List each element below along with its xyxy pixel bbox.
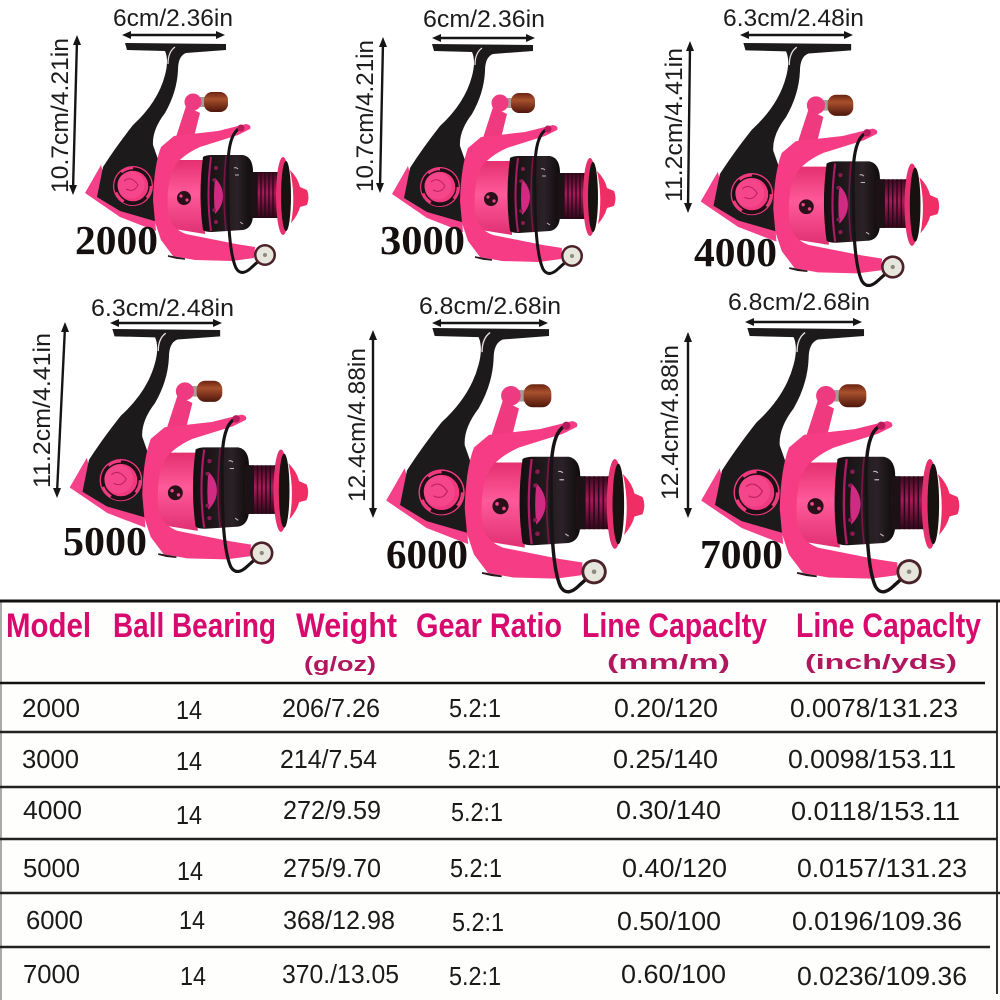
table row 4000: 0.30/140 [616, 795, 721, 825]
table row 7000 [23, 959, 967, 991]
panel: 3000 reel [352, 6, 616, 273]
table header row: (inch/yds) [805, 652, 957, 674]
table header row: Weight [296, 607, 397, 645]
reel illustration 7000 [701, 328, 959, 592]
table row 6000: 0.0196/109.36 [792, 906, 962, 936]
width label 4000: 6.3cm/2.48in [723, 5, 864, 32]
width arrow 3000 [432, 34, 535, 42]
model label 4000: 4000 [694, 229, 777, 275]
table row 2000: 2000 [22, 693, 80, 723]
table row 2000 [22, 693, 958, 725]
reel illustration 2000 [85, 43, 308, 272]
table row 7000: 7000 [23, 959, 80, 989]
height label 6000: 12.4cm/4.88in [344, 348, 371, 502]
table row 6000 [26, 905, 962, 937]
table row 4000: 4000 [23, 795, 82, 825]
table row 5000 [23, 853, 967, 886]
panel: 6000 reel [344, 293, 644, 592]
table row 5000: 5.2:1 [450, 853, 502, 883]
table row 7000: 0.0236/109.36 [797, 961, 967, 991]
table row 3000 [22, 744, 956, 776]
height label 4000: 11.2cm/4.41in [661, 48, 688, 202]
height label 2000: 10.7cm/4.21in [47, 38, 74, 193]
width label 2000: 6cm/2.36in [113, 5, 233, 32]
model label 5000: 5000 [63, 518, 147, 564]
width arrow 7000 [745, 318, 862, 326]
reel illustration 5000 [70, 329, 308, 571]
width arrow 2000 [122, 31, 225, 39]
table row 7000: 370./13.05 [282, 959, 399, 989]
height label 7000: 12.4cm/4.88in [657, 345, 684, 500]
table row 5000: 0.0157/131.23 [797, 853, 967, 883]
table row 7000: 0.60/100 [621, 959, 726, 989]
table row 3000: 5.2:1 [448, 744, 500, 774]
table row 6000: 5.2:1 [452, 907, 504, 937]
table row 6000: 0.50/100 [617, 906, 721, 936]
model label 2000: 2000 [75, 217, 158, 263]
table row 5000: 14 [177, 856, 203, 886]
model label 7000: 7000 [700, 531, 783, 577]
panel: 2000 reel [47, 5, 308, 272]
height arrow 3000 [376, 37, 387, 193]
table row 2000: 14 [176, 695, 202, 725]
width label 7000: 6.8cm/2.68in [728, 289, 870, 316]
height arrow 7000 [684, 332, 692, 518]
table row 4000: 5.2:1 [451, 797, 503, 827]
table row 2000: 0.0078/131.23 [790, 693, 958, 723]
height arrow 5000 [53, 322, 69, 498]
reel illustration 6000 [386, 328, 644, 592]
table row 5000: 5000 [23, 853, 80, 883]
table row 2000: 206/7.26 [282, 693, 380, 723]
table row 7000: 14 [180, 961, 206, 991]
table row 7000: 5.2:1 [449, 961, 501, 991]
height arrow 2000 [69, 35, 81, 195]
height label 3000: 10.7cm/4.21in [352, 40, 379, 192]
model label 6000: 6000 [386, 531, 468, 577]
table row 6000: 368/12.98 [283, 905, 395, 935]
specification table [0, 601, 1000, 1000]
height arrow 4000 [684, 41, 694, 213]
table row 6000: 6000 [26, 905, 83, 935]
table row 4000: 272/9.59 [283, 795, 381, 825]
panel: 4000 reel [661, 5, 939, 285]
model label 3000: 3000 [380, 217, 465, 263]
table row 2000: 0.20/120 [614, 693, 718, 723]
table row 5000: 275/9.70 [283, 853, 381, 883]
reel illustration 4000 [701, 43, 939, 285]
table header row: Ball Bearing [113, 607, 276, 645]
table row 3000: 214/7.54 [280, 744, 377, 774]
table row 3000: 0.0098/153.11 [788, 744, 956, 774]
table row 4000 [23, 795, 960, 830]
table row 3000: 0.25/140 [613, 744, 718, 774]
reel illustration 3000 [392, 44, 616, 273]
table row 4000: 14 [176, 800, 202, 830]
table row 5000: 0.40/120 [622, 853, 727, 883]
table header row: Model [6, 607, 91, 645]
panel: 5000 reel [29, 295, 308, 571]
height label 5000: 11.2cm/4.41in [29, 333, 56, 488]
height arrow 6000 [369, 330, 377, 518]
table header row: (g/oz) [304, 654, 376, 676]
width label 5000: 6.3cm/2.48in [91, 295, 234, 322]
table header row [6, 607, 981, 676]
table header row: Line Capaclty [582, 607, 767, 645]
width arrow 4000 [740, 31, 853, 39]
table row 3000: 14 [176, 746, 202, 776]
table header row: Gear Ratio [416, 607, 562, 645]
table row 3000: 3000 [22, 744, 79, 774]
table header row: (mm/m) [607, 652, 730, 674]
width arrow 5000 [110, 319, 222, 327]
width arrow 6000 [432, 319, 548, 327]
width label 3000: 6cm/2.36in [423, 6, 545, 33]
table row 6000: 14 [179, 905, 205, 935]
panel: 7000 reel [657, 289, 959, 592]
width label 6000: 6.8cm/2.68in [419, 293, 561, 320]
table row 2000: 5.2:1 [449, 693, 501, 723]
table row 4000: 0.0118/153.11 [791, 796, 960, 826]
